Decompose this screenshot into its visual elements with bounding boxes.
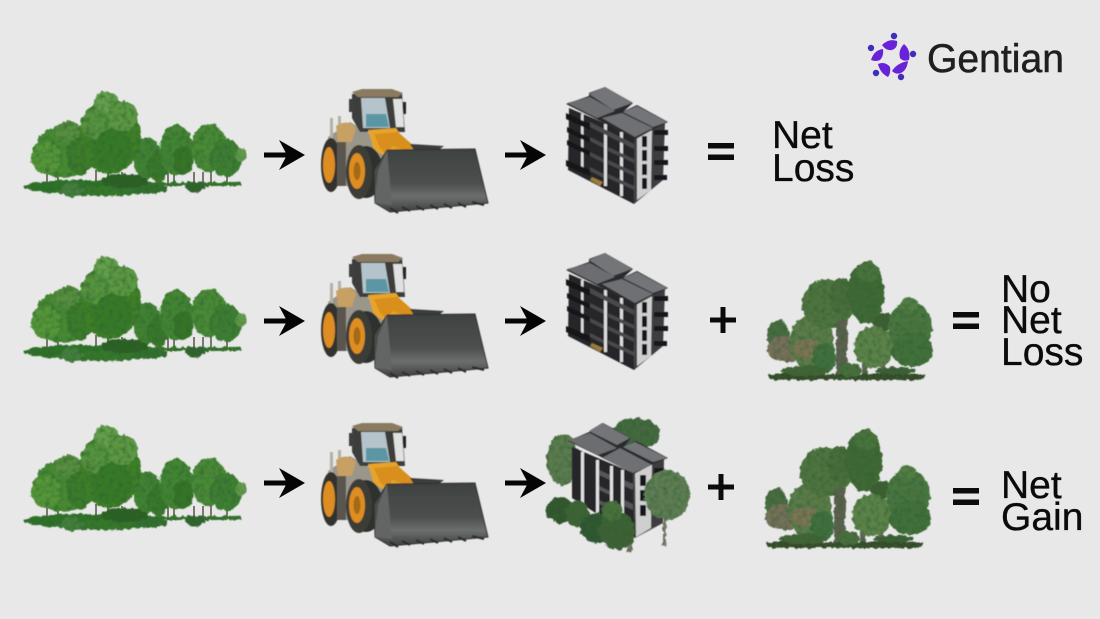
row 1: net loss — [24, 87, 854, 213]
arrow — [264, 140, 305, 170]
result label: Net Loss: Net — [772, 114, 833, 157]
forest — [24, 256, 247, 362]
wheel loader — [321, 89, 488, 213]
wheel loader — [321, 423, 488, 547]
result label: No Net Loss: Net — [1001, 299, 1062, 342]
plus sign — [708, 474, 734, 500]
result label: Net Gain: Net — [1001, 464, 1062, 507]
arrow — [505, 468, 546, 498]
arrow — [505, 306, 546, 336]
apartment building — [566, 87, 668, 204]
row 2: no net loss — [24, 253, 1083, 380]
arrow — [264, 468, 305, 498]
result label: Net Loss: Loss — [772, 147, 854, 190]
result label: Net Gain: Gain — [1001, 496, 1083, 539]
result label: No Net Loss: Loss — [1001, 331, 1083, 374]
arrow — [505, 140, 546, 170]
row 3: net gain — [24, 418, 1083, 552]
equals sign — [708, 143, 734, 160]
logo: Gentian — [868, 33, 1064, 81]
equals sign — [953, 488, 979, 505]
forest — [24, 91, 247, 197]
apartment building — [566, 253, 668, 370]
icon: Gentian flower mark — [868, 33, 916, 80]
plus sign — [710, 307, 736, 333]
wheel loader — [321, 254, 488, 378]
offset woodland — [767, 262, 933, 380]
result label: No Net Loss: No — [1001, 268, 1051, 311]
building surrounded by trees — [546, 418, 690, 552]
offset woodland — [765, 430, 931, 548]
arrow — [264, 306, 305, 336]
logo wordmark: Gentian — [927, 37, 1064, 81]
forest — [24, 425, 247, 531]
equals sign — [953, 312, 979, 329]
